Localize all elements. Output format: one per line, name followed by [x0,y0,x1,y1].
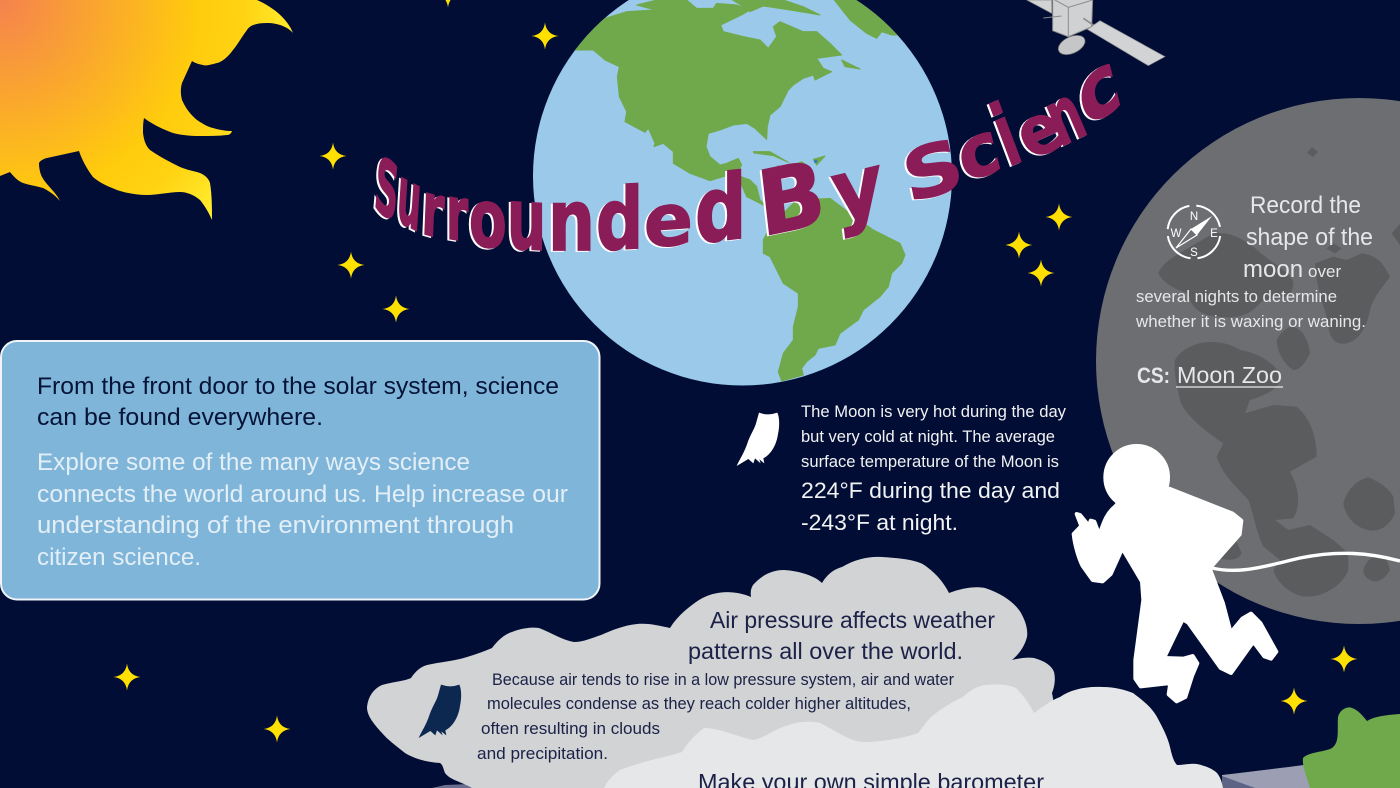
title: o [469,172,507,268]
panel: air pressure cloud: patterns all over the world. [688,638,963,664]
panel: intro box: connects the world around us. Help increase our [37,481,568,508]
title [371,31,1129,270]
icon: compass: N [1190,211,1198,223]
moon [1096,98,1400,624]
panel: intro box: From the front door to the solar system, science [37,373,559,400]
panel: intro box: citizen science. [37,544,201,571]
title: u [395,146,424,251]
moon temperature fact: -243°F at night. [801,510,958,535]
moon activity text: Moon Zoo [1177,362,1282,388]
title: u [507,170,546,270]
sun [0,0,293,220]
moon activity text [1135,192,1373,388]
moon activity text: moon over [1243,256,1341,283]
title: r [446,168,468,260]
title: S [371,140,402,241]
panel: air pressure cloud: Because air tends to rise in a low pressure system, air and water [492,671,954,689]
icon: dark owl [419,685,461,738]
moon activity text: Record the [1250,192,1361,219]
earth globe [533,0,952,386]
moon activity text: whether it is waxing or waning. [1135,312,1366,331]
mountains [432,765,1320,788]
panel: air pressure cloud: often resulting in clouds [481,720,660,738]
panel: intro box: Explore some of the many ways science [37,449,470,476]
panel: intro box: understanding of the environment through [37,512,514,539]
panel: air pressure cloud: Air pressure affects weather [710,607,995,633]
moon temperature fact: 224°F during the day and [801,478,1060,503]
title: i [980,85,1032,186]
icon: white owl [737,413,779,466]
moon temperature fact: The Moon is very hot during the day [801,403,1067,421]
moon activity text: shape of the [1246,224,1373,251]
astronaut [1074,446,1276,701]
panel: air pressure cloud: and precipitation. [477,745,608,763]
title: B [753,140,830,257]
tether [1212,553,1400,570]
title: n [548,171,595,270]
moon activity text: several nights to determine [1136,287,1337,306]
panel: intro box [1,341,600,600]
icon: compass: W [1171,228,1182,240]
icon: compass: E [1210,228,1218,240]
title: S [896,124,970,220]
panel: barometer cloud [604,684,1223,788]
satellite [1027,0,1165,66]
title: d [596,169,643,270]
moon temperature fact: but very cold at night. The average [801,428,1055,446]
title: n [1032,67,1097,164]
icon: compass: S [1190,247,1198,259]
panel: air pressure cloud: molecules condense as they reach colder higher altitudes, [487,695,911,713]
icon: compass [1168,206,1220,259]
title: c [1067,31,1129,147]
panel: intro box: can be found everywhere. [37,404,323,431]
moon temperature fact [801,403,1067,535]
title: d [695,155,747,265]
moon activity text: CS: [1137,363,1170,388]
bush [1303,707,1400,788]
title: y [827,134,888,241]
panel: air pressure cloud [367,557,1070,788]
title: r [420,163,446,257]
title: c [948,104,1008,199]
title: e [1002,87,1077,175]
moon temperature fact: surface temperature of the Moon is [801,453,1059,471]
title: e [644,177,693,264]
